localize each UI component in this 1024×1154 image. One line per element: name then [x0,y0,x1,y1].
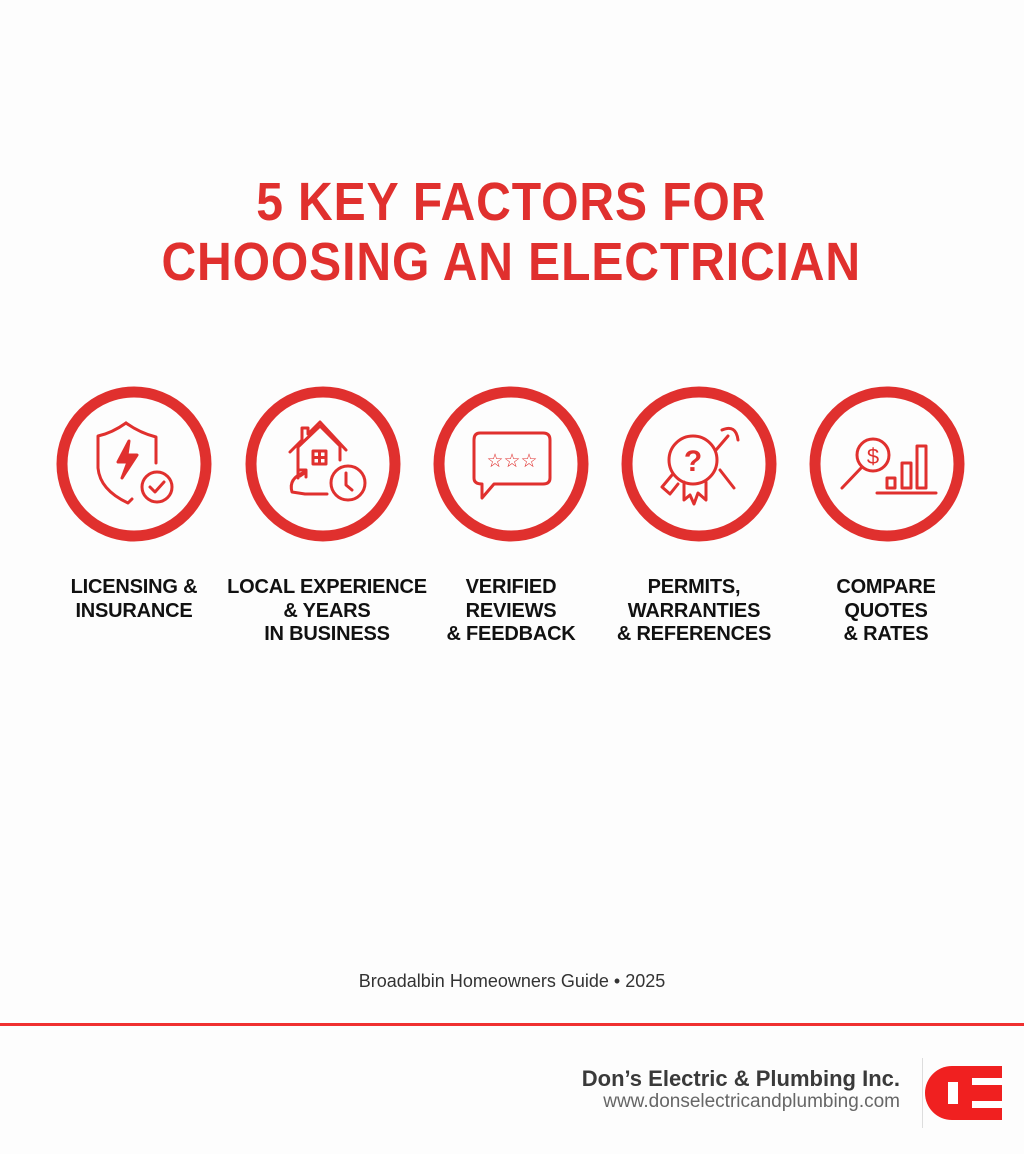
label 4: WARRANTIES [628,600,760,622]
title [161,172,861,292]
icon: compare quotes: $ [867,444,879,469]
icons row [56,386,964,542]
label 1: LICENSING & [71,576,197,598]
label 2: IN BUSINESS [264,623,390,645]
icon: review bubble [439,392,583,536]
title: 5 KEY FACTORS FOR [256,172,766,232]
icon: permits wrench: ? [684,445,702,478]
icon: house clock [251,392,395,536]
company info: Don’s Electric & Plumbing Inc. [582,1066,900,1091]
footer note: Broadalbin Homeowners Guide • 2025 [359,971,665,991]
label 2 [227,576,427,645]
label 3: & FEEDBACK [446,623,576,645]
label 3: REVIEWS [466,600,556,622]
icon: review bubble: ☆☆☆ [486,450,538,472]
logo [922,1058,1002,1128]
company info [582,1066,900,1112]
label 5: COMPARE [836,576,936,598]
icon: compare quotes [815,392,959,536]
label 4 [617,576,771,645]
label 2: & YEARS [283,600,371,622]
label 3 [446,576,576,645]
label 3: VERIFIED [466,576,556,598]
company info: www.donselectricandplumbing.com [603,1091,900,1112]
title: CHOOSING AN ELECTRICIAN [161,232,861,292]
icon: shield licensing [62,392,206,536]
label 5: QUOTES [844,600,928,622]
label 5 [836,576,936,645]
label 5: & RATES [844,623,928,645]
label 4: PERMITS, [648,576,740,598]
icon: permits wrench [627,392,771,536]
label 4: & REFERENCES [617,623,771,645]
label 1: INSURANCE [75,600,193,622]
label 2: LOCAL EXPERIENCE [227,576,427,598]
label 1 [71,576,197,622]
